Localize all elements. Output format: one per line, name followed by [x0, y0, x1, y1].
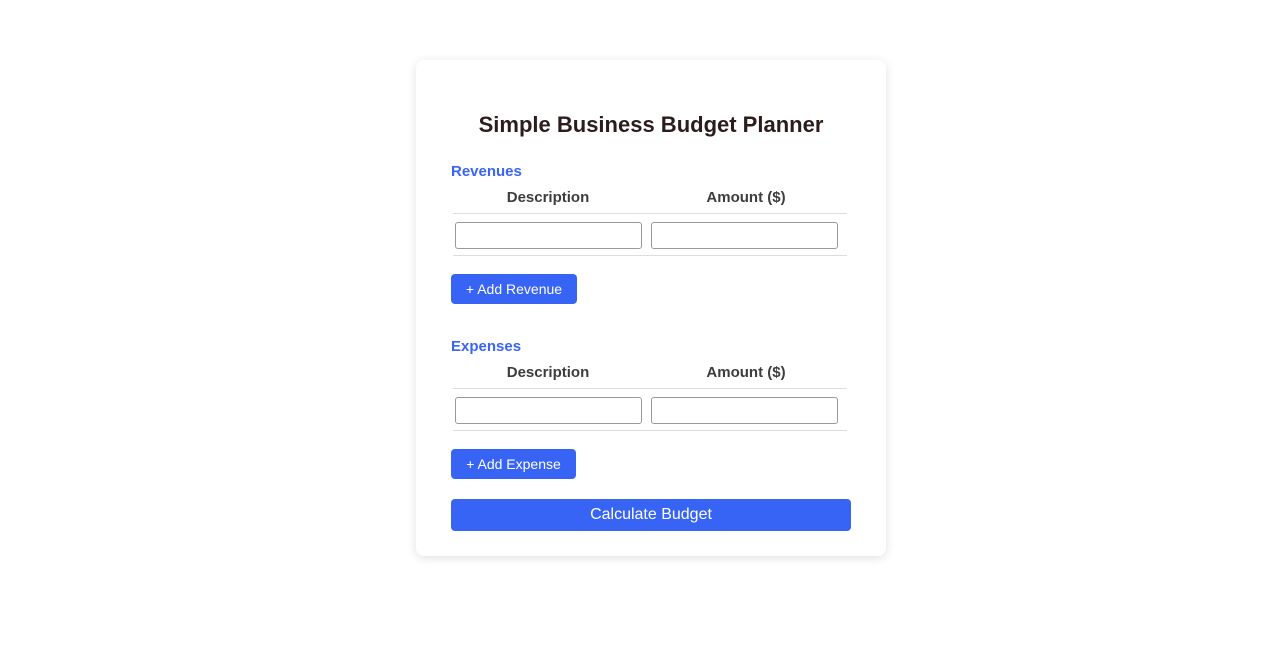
revenue table [453, 189, 847, 256]
button: calculate budget [451, 499, 851, 531]
button: calculate budget: Calculate Budget [590, 506, 712, 523]
header: description: Description [507, 189, 589, 206]
header: amount: Amount ($) [706, 364, 786, 381]
header: amount: Amount ($) [706, 189, 786, 206]
heading: expenses: Expenses [451, 338, 521, 355]
title: Simple Business Budget Planner [479, 112, 823, 137]
heading: revenues: Revenues [451, 163, 522, 180]
input: revenue amount [651, 222, 838, 249]
input: expense description [455, 397, 642, 424]
input: revenue description [455, 222, 642, 249]
button: add expense [451, 449, 576, 479]
button: add revenue [451, 274, 577, 304]
button: add expense: + Add Expense [466, 456, 561, 472]
input: expense amount [651, 397, 838, 424]
expense table [453, 364, 847, 431]
panel: budget planner card [416, 60, 886, 556]
header: description: Description [507, 364, 589, 381]
button: add revenue: + Add Revenue [466, 281, 562, 297]
